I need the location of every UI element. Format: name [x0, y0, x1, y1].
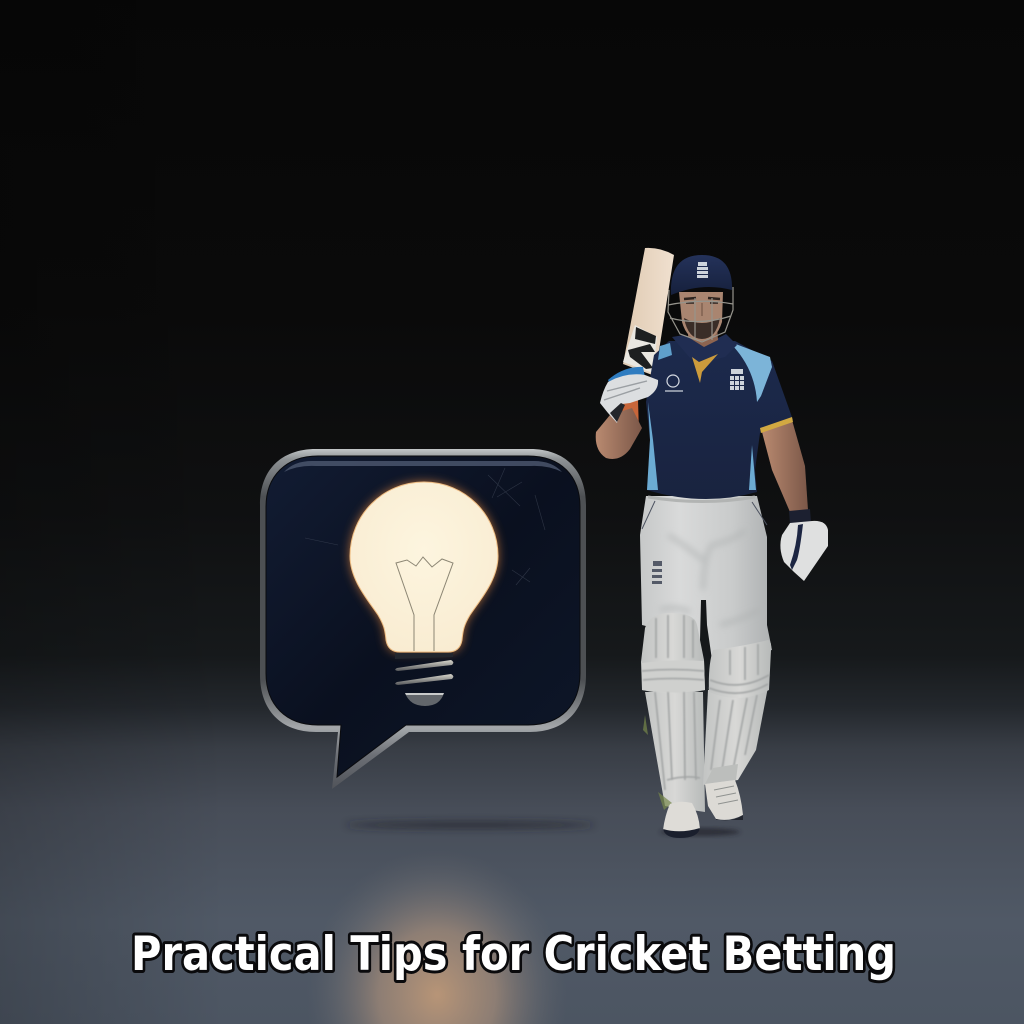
player shadow	[660, 828, 740, 836]
right glove	[780, 509, 828, 581]
cricket bat	[622, 248, 674, 436]
bubble frame	[260, 449, 586, 789]
right arm	[762, 420, 808, 512]
bulb glow	[350, 482, 498, 652]
bubble face	[266, 456, 580, 777]
right batting pad	[703, 640, 771, 785]
bulb filament	[396, 557, 453, 651]
helmet	[668, 255, 733, 342]
bulb glass	[350, 482, 498, 652]
left arm	[596, 408, 642, 459]
shirt crest	[730, 369, 744, 390]
side panels	[647, 402, 658, 490]
shirt sponsor logo	[665, 375, 683, 391]
face	[679, 292, 723, 341]
neck	[688, 325, 718, 347]
trouser folds	[660, 530, 760, 625]
collar	[672, 334, 737, 363]
helmet grille	[668, 287, 733, 342]
cricket player	[596, 248, 828, 838]
bubble top gloss	[284, 461, 562, 472]
shoes	[663, 780, 743, 838]
bulb screw base	[395, 653, 453, 706]
scratches	[305, 468, 545, 585]
left glove	[600, 367, 658, 423]
shirt	[646, 334, 793, 499]
trouser logo	[652, 561, 662, 584]
speech bubble with lightbulb	[260, 449, 586, 789]
sleeve trim	[760, 417, 793, 433]
shadow under speech bubble	[345, 822, 595, 828]
title: Practical Tips for Cricket Betting	[131, 927, 896, 982]
trousers	[640, 496, 772, 660]
waistband and seams	[642, 497, 767, 529]
shoulder panels	[733, 343, 772, 402]
left batting pad	[641, 613, 705, 812]
